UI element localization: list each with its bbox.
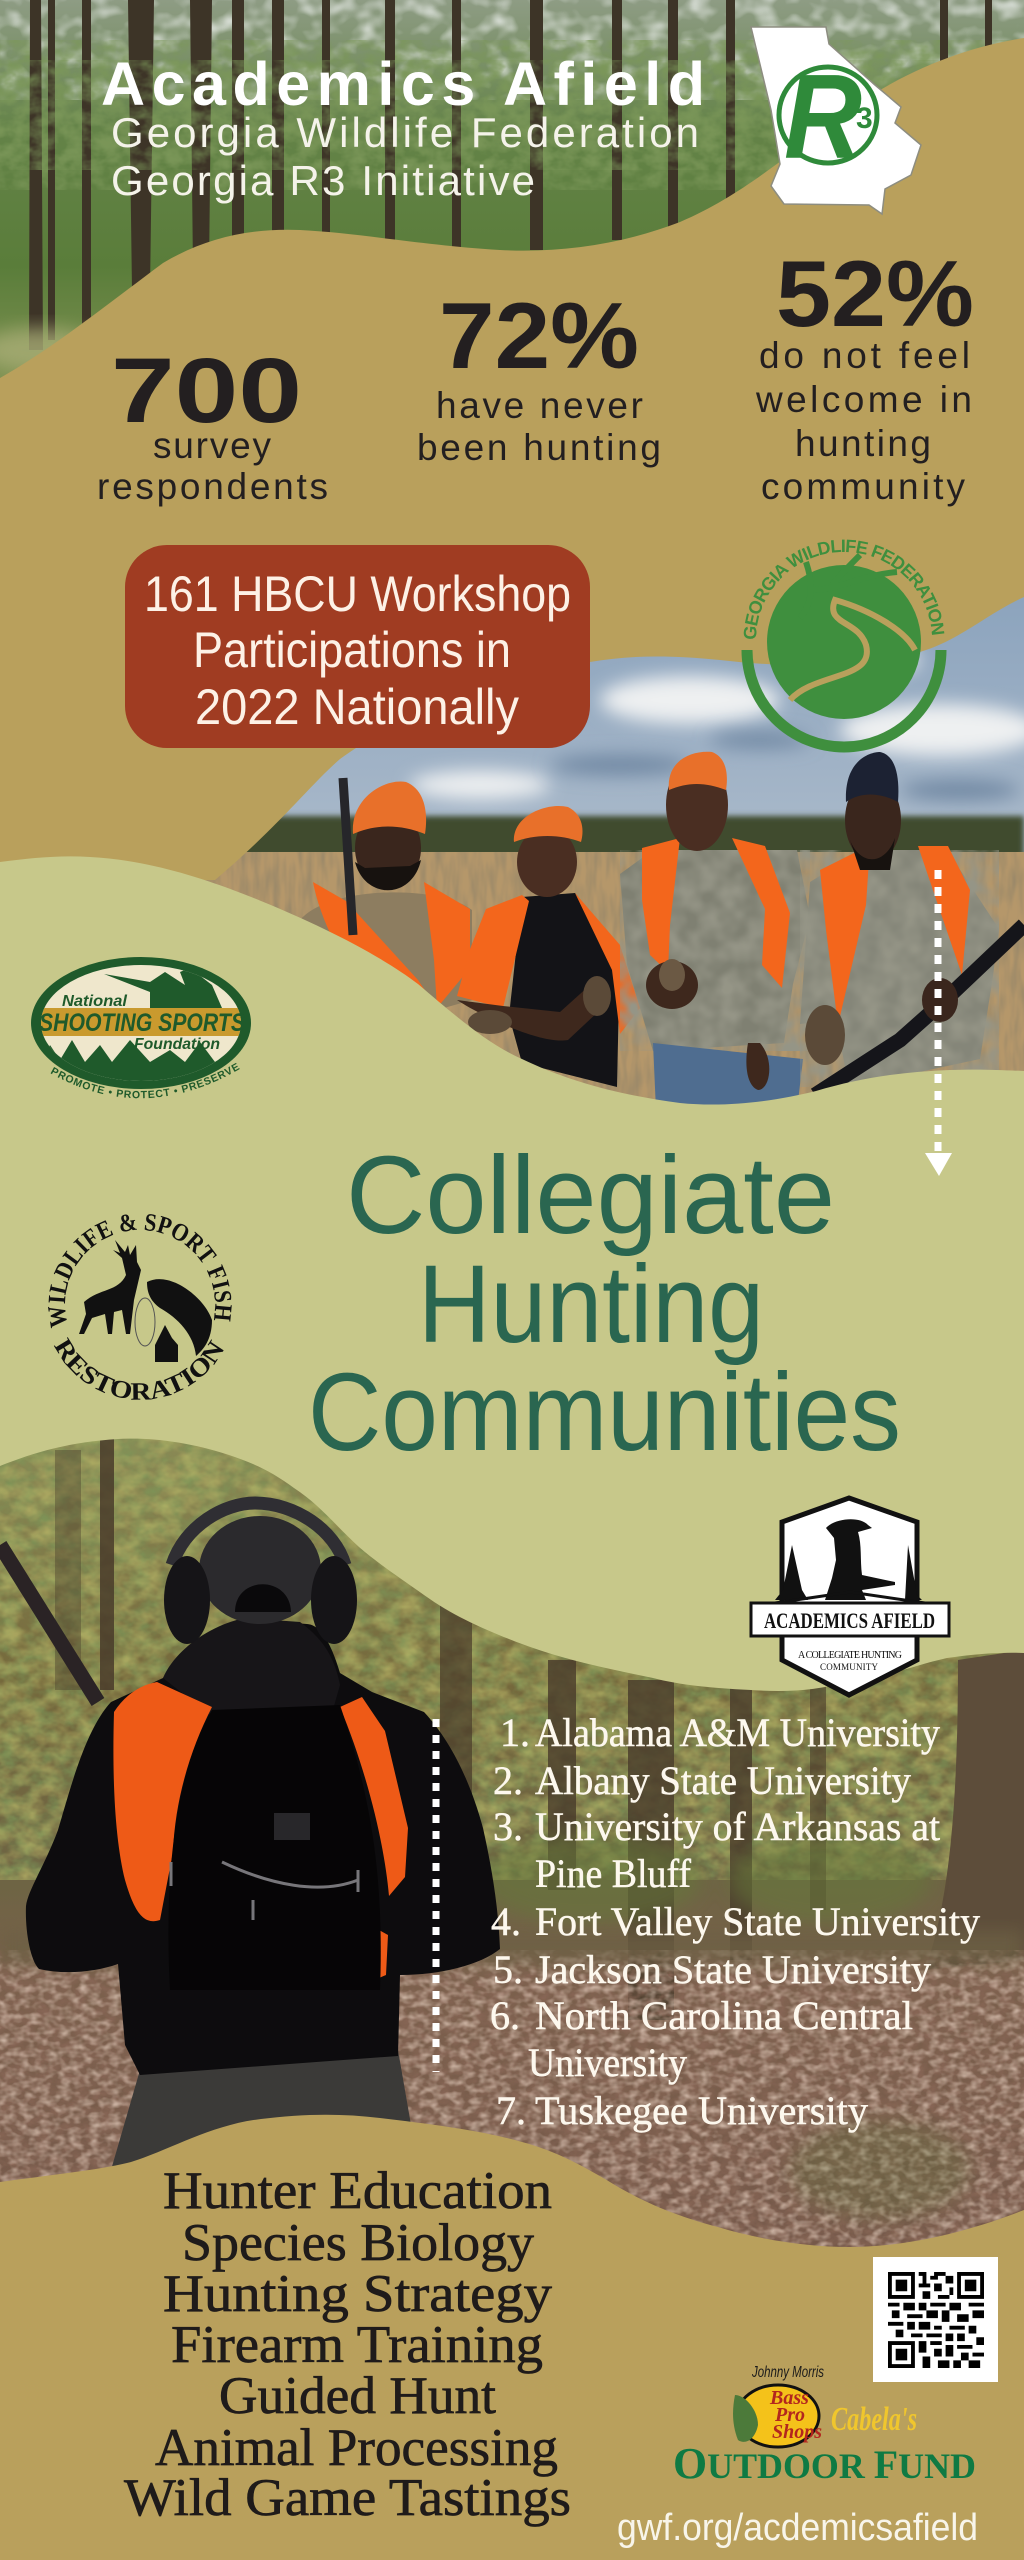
logo: Bass Pro Shops Cabela's Outdoor Fund: Cabela's	[831, 2401, 917, 2438]
arrow: dotted line down	[925, 870, 952, 1176]
title: Academics Afield	[101, 50, 705, 118]
heading: Collegiate Hunting Communities: Communities	[308, 1351, 901, 1474]
list: workshop activities: Guided Hunt	[219, 2367, 496, 2425]
list: participating universities: 3.	[493, 1804, 523, 1849]
logo: Wildlife and Sport Fish Restoration: WILDLIFE & SPORT FISH	[48, 1214, 232, 1328]
logo: Georgia Wildlife Federation	[742, 540, 946, 752]
logo: National Shooting Sports Foundation: National	[62, 993, 128, 1010]
stat: 52% not welcome: 52%	[776, 241, 974, 346]
logo: Georgia state with R3: R	[784, 50, 862, 184]
hunter 1	[300, 778, 472, 1010]
logo: Bass Pro Shops Cabela's Outdoor Fund: Bass	[769, 2387, 809, 2409]
callout: workshop participations: 161 HBCU Workshop	[144, 566, 571, 622]
hunter 2	[457, 806, 640, 1087]
deer	[79, 1240, 141, 1334]
stat: 52% not welcome: welcome in	[755, 379, 972, 420]
headband	[172, 1503, 345, 1565]
hunter 3	[620, 752, 810, 1110]
logo: Academics Afield badge	[751, 1498, 949, 1695]
list: participating universities: Tuskegee University	[535, 2088, 868, 2133]
logo: National Shooting Sports Foundation: Foundation	[134, 1036, 220, 1053]
logo: National Shooting Sports Foundation	[31, 957, 251, 1098]
list: workshop activities: Hunter Education	[163, 2162, 552, 2220]
subtitle: organizations	[111, 109, 699, 204]
logo: Wildlife and Sport Fish Restoration: RESTORATION	[54, 1337, 224, 1400]
list: workshop activities	[124, 2162, 571, 2527]
callout: workshop participations: Participations in	[193, 622, 511, 678]
hunter figure seen from behind	[0, 1503, 500, 2170]
stat: 72% never hunted: have never	[436, 385, 643, 426]
list: participating universities: Pine Bluff	[535, 1851, 692, 1896]
divider: dotted line beside list	[432, 1719, 440, 2072]
logo: National Shooting Sports Foundation: SHOOTING SPORTS	[39, 1009, 245, 1037]
list: participating universities: University	[528, 2040, 687, 2085]
panel: forest photo background	[0, 0, 1024, 430]
logo: Georgia Wildlife Federation: GEORGIA WILDLIFE FEDERATION	[744, 540, 944, 639]
jacket	[26, 1619, 500, 2075]
pants	[111, 2050, 420, 2170]
heading: Collegiate Hunting Communities: Collegiate	[346, 1134, 835, 1257]
panel: hunter in forest photo	[0, 1430, 1024, 2260]
callout: workshop participations	[125, 545, 590, 748]
list: participating universities: 4.	[491, 1899, 521, 1944]
panel: tan activities background	[0, 2115, 1024, 2560]
heading: Collegiate Hunting Communities	[308, 1134, 901, 1474]
panel: tan survey background	[0, 38, 1024, 880]
head	[199, 1516, 321, 1624]
list: participating universities: 5.	[493, 1947, 523, 1992]
website address: gwf.org/acdemicsafield	[617, 2507, 978, 2549]
stat: 72% never hunted: 72%	[439, 283, 639, 388]
list: workshop activities: Hunting Strategy	[163, 2265, 553, 2323]
angler	[155, 1325, 178, 1362]
stat: 72% never hunted: been hunting	[417, 427, 661, 468]
hunter 4	[800, 752, 1024, 1095]
hood	[163, 1618, 340, 1727]
orange vest right	[340, 1697, 408, 1978]
list: participating universities: Jackson State University	[535, 1947, 931, 1992]
list: participating universities: North Carolina Central	[535, 1993, 913, 2038]
panel: group photo of four hunters	[200, 590, 1024, 1132]
logo: Bass Pro Shops Cabela's Outdoor Fund: OUTDOOR FUND	[673, 2439, 976, 2488]
fish	[147, 1279, 212, 1356]
subtitle: organizations: Georgia Wildlife Federation	[111, 109, 699, 156]
subtitle: organizations: Georgia R3 Initiative	[111, 157, 535, 204]
list: participating universities: Fort Valley State University	[535, 1899, 980, 1944]
list: participating universities: Alabama A&M University	[535, 1710, 940, 1755]
stat: 700 survey respondents: respondents	[97, 466, 328, 507]
list: workshop activities: Animal Processing	[155, 2419, 558, 2477]
fishing line loop	[135, 1298, 155, 1346]
stat: 700 survey respondents	[97, 340, 328, 507]
logo: Academics Afield badge: ACADEMICS AFIELD	[764, 1608, 935, 1633]
stat: 72% never hunted	[417, 283, 661, 468]
logo: Bass Pro Shops Cabela's Outdoor Fund: Pro	[774, 2404, 805, 2426]
list: participating universities: Albany State University	[535, 1758, 911, 1803]
list: participating universities: 2.	[493, 1758, 523, 1803]
stat: 52% not welcome: do not feel	[759, 335, 970, 376]
ear muffs	[164, 1556, 210, 1644]
list: participating universities	[490, 1710, 980, 2133]
logo: Wildlife and Sport Fish Restoration	[48, 1214, 232, 1400]
stat: 52% not welcome	[755, 241, 974, 507]
list: participating universities: 6.	[490, 1993, 520, 2038]
list: workshop activities: Species Biology	[182, 2214, 535, 2272]
logo: Bass Pro Shops Cabela's Outdoor Fund	[673, 2364, 976, 2488]
logo: Academics Afield badge: COMMUNITY	[820, 1662, 878, 1672]
backpack zipper pulls	[171, 1862, 358, 1920]
backpack	[168, 1705, 381, 1990]
logo: Georgia state with R3: 3	[856, 102, 873, 135]
logo: Bass Pro Shops Cabela's Outdoor Fund: Johnny Morris	[751, 2364, 824, 2381]
stat: 700 survey respondents: 700	[111, 340, 302, 442]
list: workshop activities: Firearm Training	[171, 2316, 543, 2374]
logo: Bass Pro Shops Cabela's Outdoor Fund: Shops	[772, 2421, 822, 2443]
QR code	[873, 2257, 998, 2382]
backpack label	[274, 1813, 310, 1840]
orange vest left	[113, 1682, 212, 1921]
stat: 52% not welcome: community	[761, 466, 966, 507]
shotgun	[0, 1545, 98, 1702]
heading: Collegiate Hunting Communities: Hunting	[418, 1243, 764, 1366]
stat: 700 survey respondents: survey	[153, 425, 272, 466]
logo: Georgia state with R3	[751, 27, 921, 214]
list: participating universities: 1.	[500, 1710, 530, 1755]
list: participating universities: 7.	[496, 2088, 526, 2133]
stat: 52% not welcome: hunting	[795, 423, 931, 464]
panel: sage collegiate background	[0, 856, 1024, 1691]
list: workshop activities: Wild Game Tastings	[124, 2469, 571, 2527]
logo: Academics Afield badge: A COLLEGIATE HUNTING	[798, 1650, 902, 1661]
callout: workshop participations: 2022 Nationally	[195, 679, 519, 735]
logo: National Shooting Sports Foundation: PROMOTE • PROTECT • PRESERVE	[50, 1063, 240, 1098]
list: participating universities: University of Arkansas at	[535, 1804, 940, 1849]
